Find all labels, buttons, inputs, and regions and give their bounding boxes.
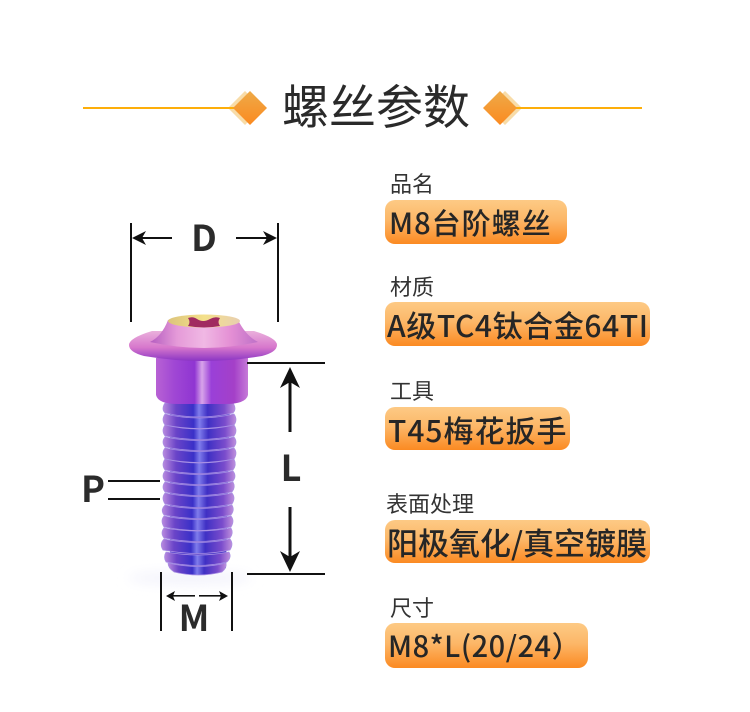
value: material: A级TC4钛合金64TI (387, 302, 649, 346)
left title ornament (83, 91, 267, 125)
dimension D (130, 210, 279, 322)
dimension P: P (81, 461, 105, 513)
value: surface treatment: 阳极氧化/真空镀膜 (387, 519, 647, 564)
label: size: 尺寸 (390, 591, 434, 623)
dimension M (160, 572, 233, 642)
neck (156, 358, 248, 404)
label: material: 材质 (390, 270, 434, 302)
dome (150, 316, 258, 348)
dimension P (81, 461, 160, 513)
value: name: M8台阶螺丝 (389, 201, 552, 243)
shadow (128, 572, 252, 584)
dimension L: L (281, 440, 301, 492)
flange (129, 331, 277, 361)
dimension L (247, 362, 325, 575)
screw photo with dimension annotations (81, 215, 325, 640)
label: surface treatment: 表面处理 (386, 487, 474, 519)
title: 螺丝参数 (282, 69, 470, 138)
value: size: M8*L(20/24） (388, 624, 581, 666)
value: tool: T45梅花扳手 (388, 407, 568, 451)
label: name: 品名 (390, 167, 434, 199)
label: tool: 工具 (390, 374, 434, 406)
thread shaft (161, 400, 236, 575)
socket (168, 314, 240, 328)
torx recess (188, 317, 220, 328)
right title ornament (483, 91, 642, 125)
